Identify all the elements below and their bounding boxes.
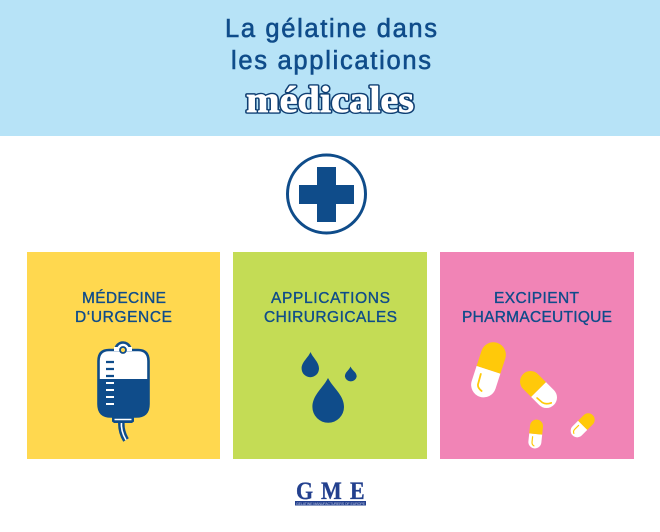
panel: médecine d'urgence [27,252,220,459]
icon: small capsule [528,419,544,449]
panel: applications chirurgicales [233,252,427,459]
panel: excipient pharmaceutique [440,252,634,459]
logo: GME: GME [296,478,365,505]
heading [264,290,397,326]
icon: medium capsule [516,367,561,412]
title: médicales [246,80,414,121]
title [225,15,437,121]
heading [75,290,172,326]
icon: large capsule [468,339,509,401]
heading: MÉDECINE [82,290,166,307]
heading [462,290,612,326]
title: les applications [231,47,431,75]
logo: GME: GELATINE MANUFACTURERS OF EUROPE [296,502,366,506]
heading: APPLICATIONS [271,290,390,307]
icon: tilted small capsule [568,411,597,440]
heading: D‘URGENCE [75,309,172,326]
heading: PHARMACEUTIQUE [462,309,612,326]
icon: medical cross [288,155,366,233]
icon: IV bag [98,342,149,440]
header banner [0,0,660,136]
title: La gélatine dans [225,15,437,43]
icon: drops [302,352,357,423]
heading: EXCIPIENT [494,290,580,307]
title: médicales [246,80,414,121]
heading: CHIRURGICALES [264,309,397,326]
